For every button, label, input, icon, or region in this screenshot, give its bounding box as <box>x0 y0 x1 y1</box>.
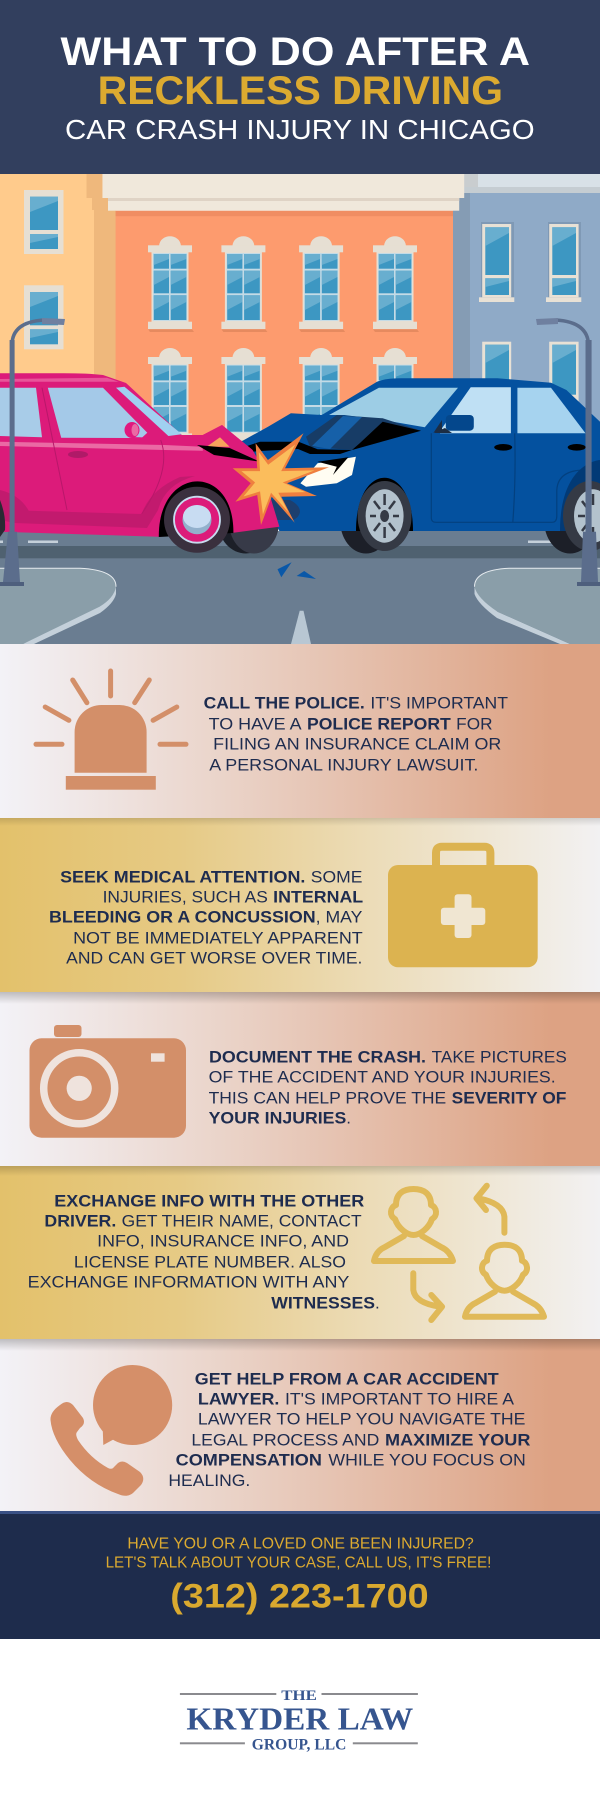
blue car door handles <box>494 444 512 451</box>
pink car windshield <box>116 387 182 436</box>
text: document the crash: DOCUMENT THE CRASH. <box>209 1047 426 1066</box>
logo: the kryder law group: THE <box>281 1688 317 1704</box>
pink car door lines <box>42 388 164 514</box>
text: exchange info: GET THEIR NAME, CONTACT <box>122 1211 362 1230</box>
text: get help from a lawyer: IT'S IMPORTANT TO HIRE A <box>285 1389 515 1408</box>
panel: seek medical attention <box>0 818 600 992</box>
text: call the police: IT'S IMPORTANT <box>370 693 508 712</box>
panel: exchange info <box>0 1166 600 1339</box>
text: document the crash: TAKE PICTURES <box>432 1047 567 1066</box>
logo: the kryder law group: KRYDER LAW <box>186 1700 413 1736</box>
text: seek medical attention <box>49 867 363 967</box>
text: exchange info: EXCHANGE INFO WITH THE OTHER <box>54 1191 364 1210</box>
left building <box>0 174 116 394</box>
right street lamp <box>536 318 600 586</box>
text: exchange info: INFO, INSURANCE INFO, AND <box>97 1231 349 1250</box>
title line: what to do after a: WHAT TO DO AFTER A <box>60 30 530 74</box>
text: exchange info: LICENSE PLATE NUMBER. ALSO <box>74 1252 346 1271</box>
text: document the crash: OF THE ACCIDENT AND YOUR INJURIES. <box>209 1067 556 1086</box>
text: call the police: TO HAVE A <box>209 714 302 733</box>
text: get help from a lawyer: COMPENSATION <box>176 1450 322 1469</box>
left sidewalk curb <box>0 568 116 644</box>
blue car crumpled hood <box>230 415 421 454</box>
illustration: car crash street scene <box>0 174 600 644</box>
pink car rear window <box>0 388 42 437</box>
text: document the crash: YOUR INJURIES <box>209 1108 346 1127</box>
title line: reckless driving: RECKLESS DRIVING <box>98 69 503 113</box>
text: call the police: A PERSONAL INJURY LAWSUIT. <box>209 755 478 774</box>
call to action text: HAVE YOU OR A LOVED ONE BEEN INJURED? <box>127 1535 474 1552</box>
logo: the kryder law group <box>180 1688 418 1753</box>
panel: get help from a lawyer <box>0 1339 600 1512</box>
icon: siren <box>36 671 186 790</box>
text: get help from a lawyer <box>168 1369 530 1490</box>
text: call the police: CALL THE POLICE. <box>204 693 365 712</box>
blue car front wheel <box>356 478 413 551</box>
text: call the police <box>204 693 508 774</box>
road debris <box>278 562 316 579</box>
text: call the police: POLICE REPORT <box>307 714 451 733</box>
blue car grille <box>268 500 300 520</box>
text: call the police: FILING AN INSURANCE CLAIM OR <box>213 734 501 753</box>
pink car door handle <box>68 451 88 458</box>
blue car <box>230 378 600 551</box>
blue car side windows <box>440 387 511 433</box>
text: seek medical attention: SOME <box>311 867 362 886</box>
icon: two people exchanging <box>374 1186 544 1320</box>
text: document the crash: SEVERITY OF <box>452 1088 566 1107</box>
panel: call the police <box>0 644 600 818</box>
logo: the kryder law group: GROUP, LLC <box>252 1736 346 1753</box>
text: exchange info: WITNESSES <box>271 1293 375 1312</box>
left street lamp <box>0 318 65 586</box>
pink car side mirror <box>124 422 146 439</box>
text: document the crash <box>209 1047 567 1127</box>
panel: document the crash <box>0 992 600 1166</box>
text: seek medical attention: AND CAN GET WORSE OVER TIME. <box>66 948 362 967</box>
call to action text <box>106 1535 491 1571</box>
pink car front wheel <box>159 481 233 553</box>
pink car lower shading <box>0 476 195 528</box>
text: get help from a lawyer: MAXIMIZE YOUR <box>385 1430 530 1449</box>
text: seek medical attention: SEEK MEDICAL ATTENTION. <box>60 867 305 886</box>
text: call the police: FOR <box>456 714 492 733</box>
phone number: (312) 223-1700 <box>170 1577 429 1615</box>
text: seek medical attention: INTERNAL <box>273 887 363 906</box>
text: get help from a lawyer: LAWYER TO HELP YOU NAVIGATE THE <box>198 1409 525 1428</box>
panel: header <box>0 0 600 174</box>
blue car rear wheel <box>560 460 600 551</box>
title line: car crash injury in chicago: CAR CRASH INJURY IN CHICAGO <box>65 114 535 145</box>
icon: phone with speech bubble <box>50 1365 172 1496</box>
text: get help from a lawyer: HEALING. <box>168 1471 250 1490</box>
text: exchange info: . <box>375 1293 380 1312</box>
road <box>0 531 600 644</box>
panel: call to action <box>0 1511 600 1639</box>
pink car rear wheel arch <box>0 500 5 537</box>
blue car door outlines <box>431 433 585 522</box>
right sidewalk curb <box>474 568 600 644</box>
pink car front window <box>48 388 147 438</box>
text: exchange info: DRIVER. <box>44 1211 116 1230</box>
far wheels behind cars <box>218 486 596 554</box>
text: get help from a lawyer: WHILE YOU FOCUS ON <box>328 1450 526 1469</box>
centre orange building <box>103 174 464 451</box>
blue car windshield <box>329 388 458 427</box>
text: seek medical attention: BLEEDING OR A CONCUSSION <box>49 907 316 926</box>
text: seek medical attention: NOT BE IMMEDIATELY APPARENT <box>73 928 363 947</box>
pink car belt line <box>0 442 203 451</box>
text: document the crash: . <box>346 1108 351 1127</box>
text: get help from a lawyer: LAWYER. <box>198 1389 279 1408</box>
text: exchange info: EXCHANGE INFORMATION WITH ANY <box>28 1272 349 1291</box>
icon: camera <box>30 1025 186 1138</box>
blue car headlight <box>300 457 356 487</box>
text: exchange info <box>28 1191 380 1312</box>
right building <box>453 174 600 433</box>
blue car side mirror <box>433 415 474 433</box>
call to action text: LET'S TALK ABOUT YOUR CASE, CALL US, IT'S FREE! <box>106 1554 491 1571</box>
pink car crumpled hood <box>197 425 260 462</box>
icon: first aid kit <box>388 847 538 967</box>
text: document the crash: THIS CAN HELP PROVE THE <box>209 1088 446 1107</box>
pink car roof highlight <box>0 378 119 382</box>
text: get help from a lawyer: GET HELP FROM A CAR ACCIDENT <box>195 1369 499 1388</box>
text: get help from a lawyer: LEGAL PROCESS AND <box>191 1430 379 1449</box>
crash starburst <box>233 433 329 525</box>
pink car <box>0 373 279 553</box>
text: seek medical attention: INJURIES, SUCH AS <box>103 887 268 906</box>
text: seek medical attention: , MAY <box>316 907 362 926</box>
